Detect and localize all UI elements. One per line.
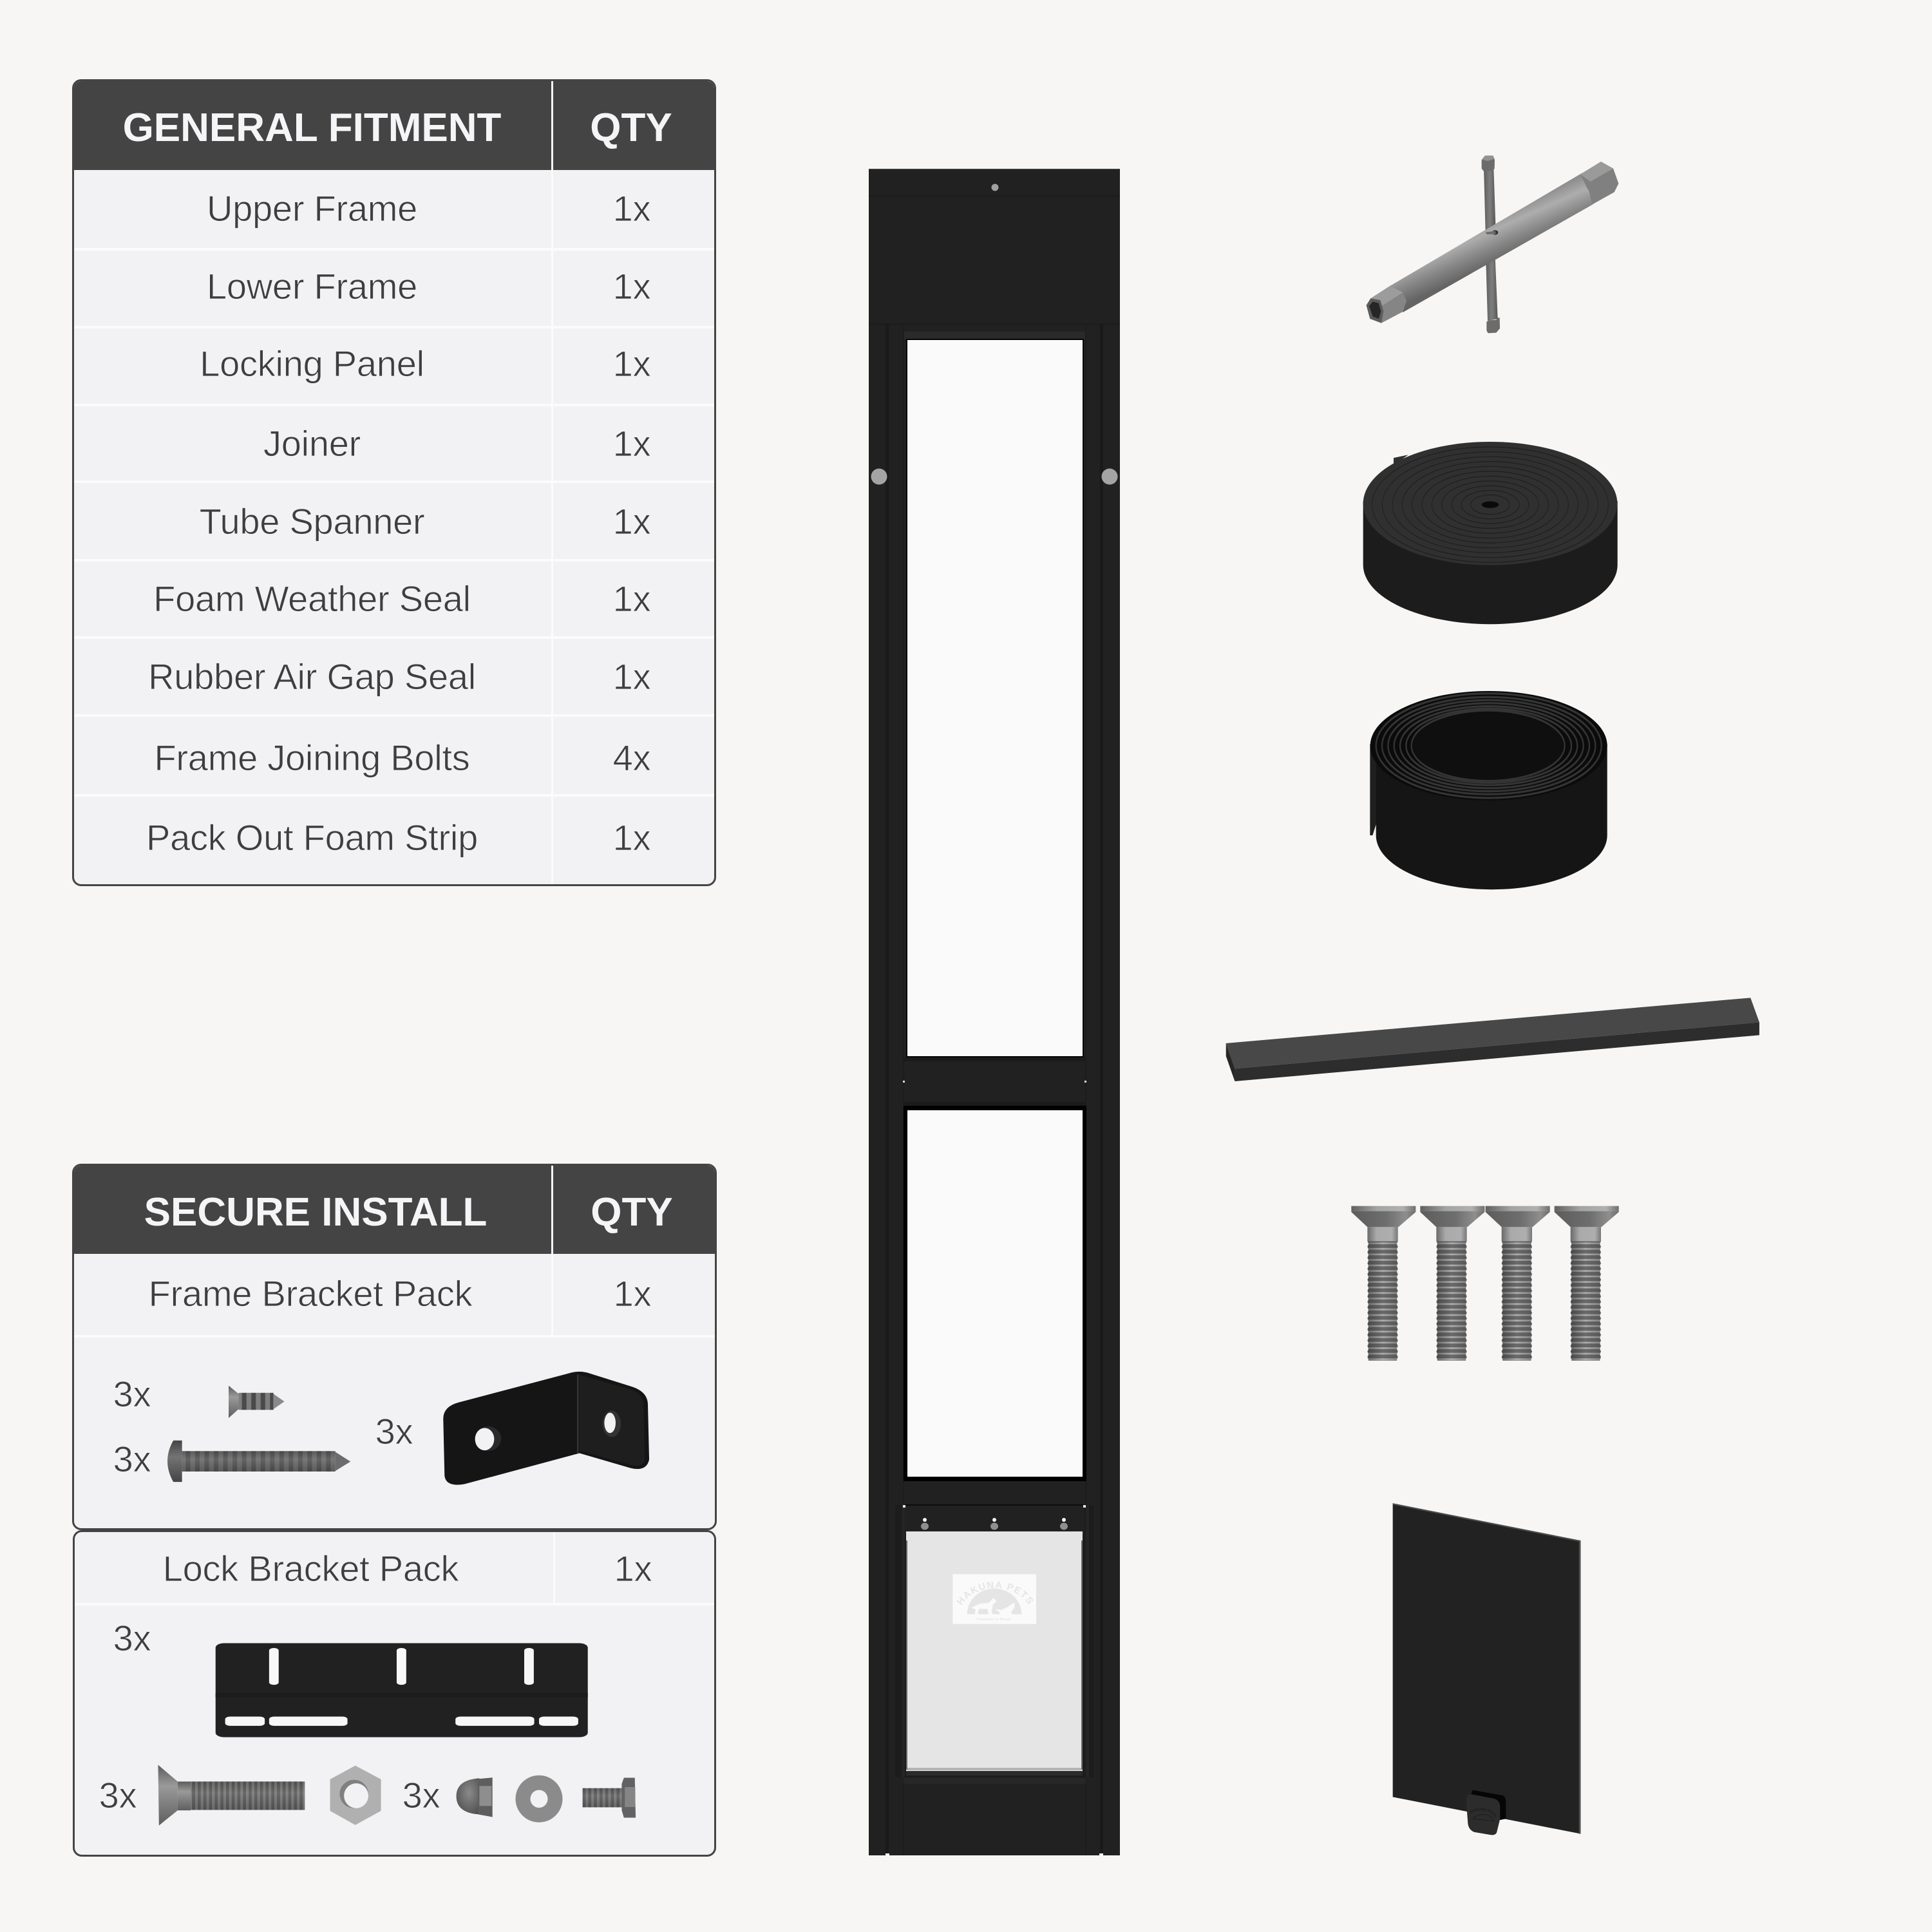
count: corner bracket: 3x [375, 1411, 413, 1452]
door frame [869, 169, 1120, 1855]
pack out foam strip [1226, 998, 1759, 1081]
count: small screw: 3x [113, 1374, 151, 1414]
hex socket upper end [1580, 162, 1618, 204]
row text: upper frame: Upper Frame [207, 188, 417, 229]
strip end face [1226, 1043, 1235, 1081]
upper window [904, 332, 1085, 1057]
row text: rubber air gap seal: Rubber Air Gap Seal [148, 656, 476, 697]
icon: short hex bolt [583, 1778, 636, 1818]
icon: corner bracket [443, 1372, 649, 1485]
icon: countersunk bolt [158, 1765, 305, 1826]
qty: upper frame: 1x [613, 188, 650, 229]
flap logo: Freedom to Roam [977, 1618, 1011, 1622]
count: countersunk bolt and nut: 3x [99, 1775, 137, 1815]
table: general fitment [72, 79, 716, 886]
qty: lock bracket pack: 1x [614, 1548, 652, 1589]
flap logo: HAKUNA PETS [957, 1582, 1033, 1605]
panel handle: HAKUNA PETS [1470, 1808, 1497, 1817]
icon: long screw [167, 1441, 350, 1482]
qty: lower frame: 1x [613, 266, 650, 307]
table: lock bracket pack [73, 1530, 716, 1857]
flap logo [953, 1574, 1036, 1624]
count: lock plate: 3x [113, 1618, 151, 1658]
row text: foam weather seal: Foam Weather Seal [153, 578, 471, 619]
bolt 3 [1486, 1206, 1550, 1361]
icon: hex nut [330, 1766, 381, 1825]
joiner bar [903, 1057, 1086, 1106]
tube body [1390, 173, 1593, 312]
top screw [992, 184, 998, 191]
cross bar lower half [1486, 256, 1500, 333]
flap housing [895, 1504, 1094, 1784]
count: dome nut, washer and bolt: 3x [402, 1775, 440, 1815]
rubber air gap seal roll [1370, 691, 1607, 889]
row text: pack out foam strip: Pack Out Foam Strip [146, 817, 478, 858]
left pin [871, 469, 887, 484]
tube spanner [1367, 156, 1619, 334]
heading: qty: QTY [591, 1190, 673, 1235]
count: long screw: 3x [113, 1439, 151, 1479]
heading: qty: QTY [590, 106, 672, 150]
right pin [1101, 469, 1118, 484]
foam weather seal roll [1363, 442, 1618, 624]
qty: joiner: 1x [613, 423, 650, 464]
hardware: lock bracket pack [158, 1643, 636, 1825]
panel sheet [1393, 1503, 1580, 1834]
row text: frame joining bolts: Frame Joining Bolts [154, 737, 470, 778]
bolt 2 [1420, 1206, 1484, 1361]
row text: tube spanner: Tube Spanner [200, 501, 424, 542]
icon: dome nut [457, 1777, 493, 1817]
row text: lower frame: Lower Frame [207, 266, 417, 307]
lower window [904, 1106, 1086, 1481]
heading: general fitment: GENERAL FITMENT [123, 106, 501, 150]
clear flap [906, 1531, 1083, 1776]
qty: frame joining bolts: 4x [613, 737, 650, 778]
bolt 4 [1555, 1206, 1619, 1361]
cross bar upper half [1482, 156, 1496, 233]
header row [74, 81, 714, 170]
icon: slotted lock plate [216, 1643, 588, 1738]
panel handle [1466, 1790, 1506, 1835]
icon: washer [515, 1776, 563, 1823]
qty: rubber air gap seal: 1x [613, 656, 650, 697]
qty: tube spanner: 1x [613, 501, 650, 542]
pet door assembly [869, 169, 1120, 1855]
header row [74, 1166, 715, 1254]
row text: lock bracket pack: Lock Bracket Pack [163, 1548, 459, 1589]
qty: foam weather seal: 1x [613, 578, 650, 619]
strip front face [1235, 1022, 1759, 1081]
strip top face [1226, 998, 1759, 1068]
hardware: frame bracket pack [167, 1372, 649, 1485]
qty: locking panel: 1x [613, 343, 650, 384]
qty: frame bracket pack: 1x [614, 1273, 651, 1314]
heading: secure install: SECURE INSTALL [144, 1190, 487, 1235]
hex socket lower end [1367, 286, 1406, 323]
table: secure install, frame bracket pack [72, 1164, 717, 1530]
frame joining bolts [1351, 1206, 1619, 1361]
icon: small screw [229, 1386, 285, 1418]
row text: frame bracket pack: Frame Bracket Pack [149, 1273, 472, 1314]
foam weather seal and rubber air gap seal [1363, 442, 1618, 890]
locking panel [1392, 1503, 1580, 1835]
qty: pack out foam strip: 1x [613, 817, 650, 858]
row text: joiner: Joiner [263, 423, 361, 464]
hanger screws [921, 1518, 1068, 1530]
row text: locking panel: Locking Panel [200, 343, 424, 384]
bolt 1 [1351, 1206, 1416, 1361]
